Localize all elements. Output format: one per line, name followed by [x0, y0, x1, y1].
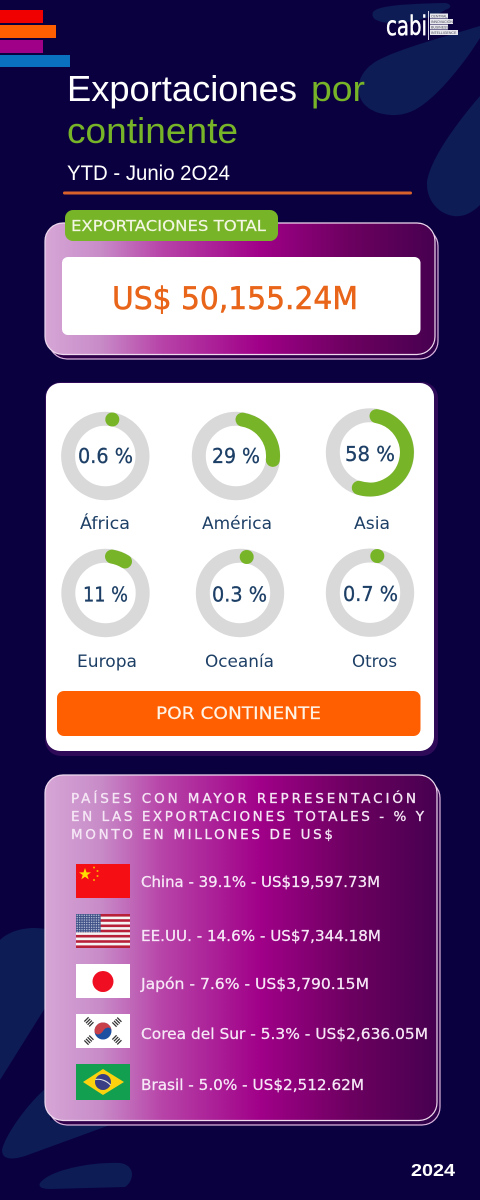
panel: top countries [45, 775, 440, 1125]
donut: América [199, 419, 273, 534]
total value card: US$ 50,155.24M [112, 281, 358, 317]
row: Corea del Sur [76, 1014, 428, 1048]
donut: América: América [202, 514, 272, 534]
row: Japón: Japón - 7.6% - US$3,790.15M [140, 975, 369, 993]
donut: Europa [68, 556, 143, 672]
flag: USA [76, 914, 130, 948]
panel heading: EN LAS EXPORTACIONES TOTALES - % Y [71, 809, 425, 825]
panel heading: MONTO EN MILLONES DE US$ [71, 827, 333, 843]
donut: Otros: 0.7 % [343, 582, 398, 606]
row: China [76, 864, 380, 898]
donut: Asia [333, 415, 407, 534]
donut: Asia: 58 % [345, 442, 395, 466]
logo: cabi: BUSINESS [431, 26, 449, 30]
flag: Japan [76, 964, 130, 998]
logo: cabi: INNOVACIÓN [431, 19, 453, 24]
donut: África: 0.6 % [78, 444, 133, 468]
donut: Asia: Asia [354, 514, 390, 534]
title [67, 68, 365, 151]
donut: Oceanía [203, 550, 277, 672]
logo: cabi: INTELLIGENCE [431, 31, 457, 35]
donut: Otros [333, 549, 407, 672]
panel: continents [45, 382, 438, 756]
donut: Oceanía: Oceanía [205, 652, 274, 672]
donut: América: 29 % [212, 444, 260, 468]
title: continente [67, 110, 238, 151]
panel heading: PAÍSES CON MAYOR REPRESENTACIÓN [71, 789, 416, 807]
title: por [311, 68, 365, 109]
title: Exportaciones [67, 68, 297, 109]
year: 2024 [411, 1160, 455, 1180]
row: Corea del Sur: Corea del Sur - 5.3% - US$2,636.05M [141, 1025, 428, 1043]
donut: Europa: 11 % [83, 582, 128, 606]
row: EE.UU. [76, 914, 381, 948]
row: EE.UU.: EE.UU. - 14.6% - US$7,344.18M [141, 927, 381, 945]
row: Japón [76, 964, 369, 998]
donut: África [68, 412, 142, 534]
flag: Brazil [76, 1064, 130, 1100]
row: China: China - 39.1% - US$19,597.73M [141, 873, 380, 891]
donut: Oceanía: 0.3 % [212, 582, 267, 606]
panel heading [71, 789, 425, 843]
button: por continente: POR CONTINENTE [156, 704, 321, 724]
button: por continente [57, 691, 420, 736]
flag: China [76, 864, 130, 898]
logo: cabi: cabi [386, 11, 427, 42]
tab: exportaciones total: EXPORTACIONES TOTAL [71, 217, 266, 235]
donut: Otros: Otros [352, 652, 397, 672]
subtitle: YTD - Junio 2O24 [67, 162, 230, 185]
tab: exportaciones total [65, 210, 278, 241]
decorative colour bars [0, 10, 70, 67]
flag: South Korea [76, 1014, 130, 1048]
total value card [62, 257, 420, 335]
donut: Europa: Europa [77, 652, 137, 672]
panel: total exports [45, 210, 438, 359]
row: Brasil [76, 1064, 364, 1100]
donut: África: África [80, 512, 130, 534]
logo: cabi: CENTRAL [431, 14, 447, 18]
row: Brasil: Brasil - 5.0% - US$2,512.62M [141, 1076, 364, 1094]
